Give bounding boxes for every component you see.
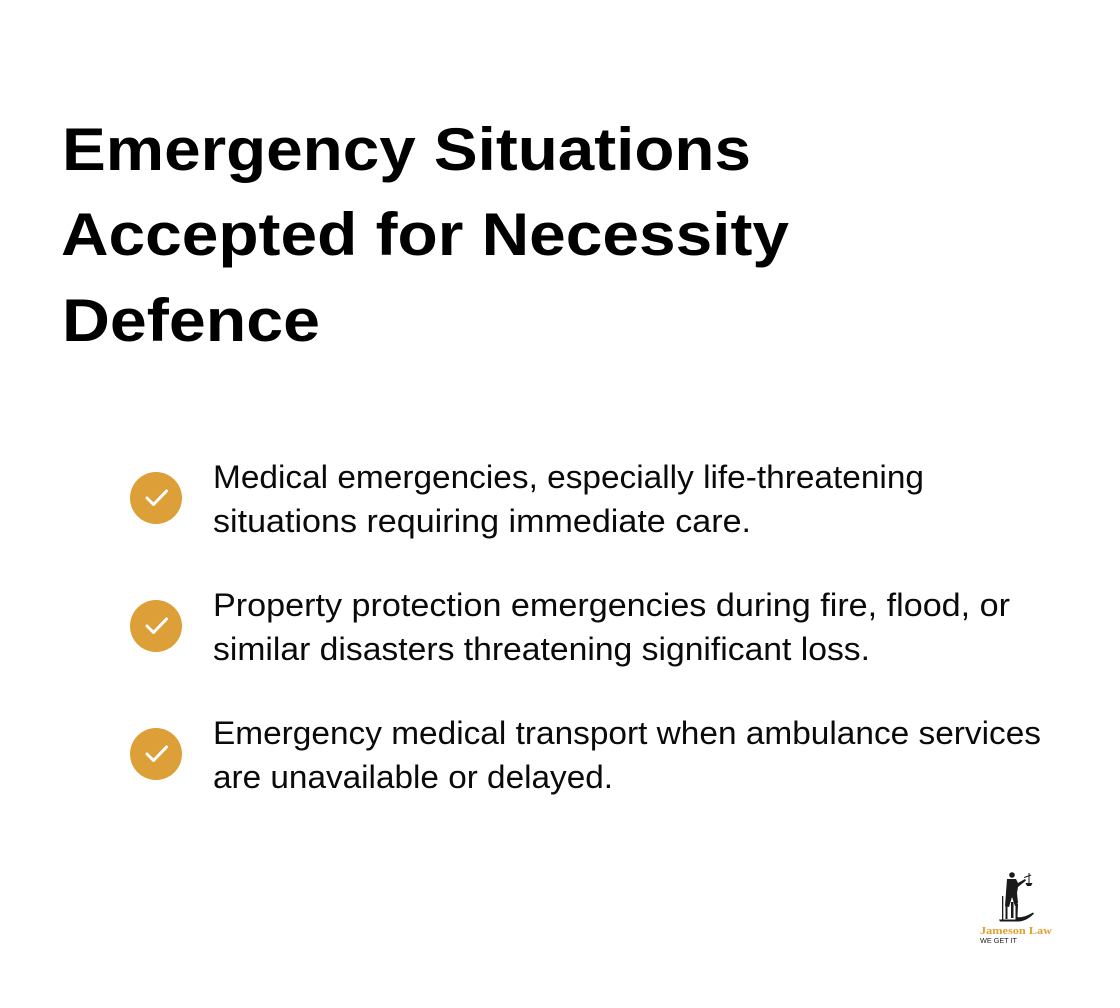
title: Defence	[62, 287, 320, 354]
text: property protection: similar disasters threatening significant loss.	[213, 631, 870, 667]
title: Emergency Situations	[62, 116, 751, 183]
text: medical transport: Emergency medical transport when ambulance services	[213, 715, 1041, 751]
logo name: Jameson Law	[980, 926, 1052, 937]
text: medical emergencies: situations requiring immediate care.	[213, 503, 751, 539]
text: property protection: Property protection emergencies during fire, flood, or	[213, 587, 1010, 623]
checklist item: property protection	[130, 587, 1010, 667]
icon: check badge	[130, 600, 182, 652]
checklist item: medical transport	[130, 715, 1041, 795]
icon: check badge	[130, 472, 182, 524]
text: medical transport: are unavailable or delayed.	[213, 759, 613, 795]
title: Accepted for Necessity	[61, 201, 790, 268]
text: medical emergencies	[213, 459, 924, 539]
logo tagline: WE GET IT	[980, 938, 1018, 945]
logo: Jameson Law	[980, 872, 1052, 945]
text: medical transport	[213, 715, 1041, 795]
title	[61, 116, 790, 354]
icon: lady justice	[999, 872, 1034, 922]
icon: check badge	[130, 728, 182, 780]
text: property protection	[213, 587, 1010, 667]
checklist item: medical emergencies	[130, 459, 924, 539]
text: medical emergencies: Medical emergencies, especially life-threatening	[213, 459, 924, 495]
